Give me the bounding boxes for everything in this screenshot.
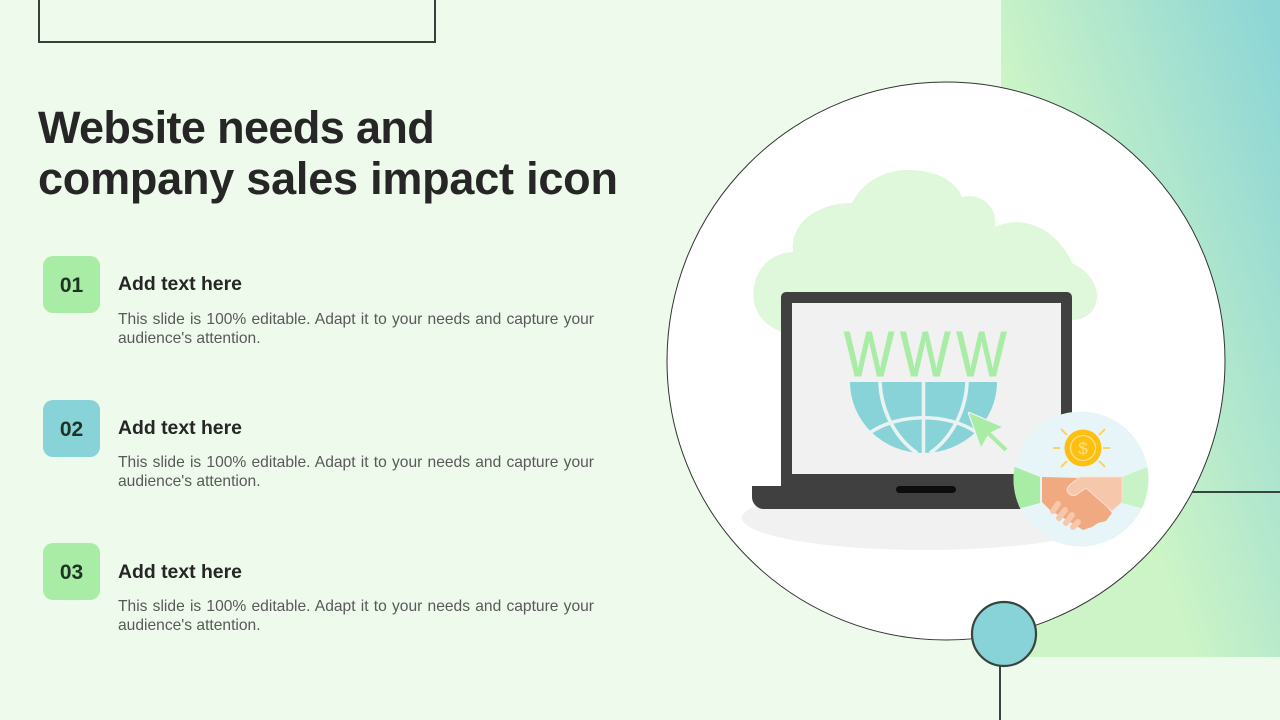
icon: cloud [753,170,1097,340]
badge 01 [43,256,100,313]
list item 02 [43,400,594,490]
small teal circle [972,602,1036,666]
list item 01 [43,256,594,347]
icon: www text: WWW [844,319,1013,390]
list item 03 [43,543,594,634]
left hand [1042,477,1112,530]
heading 03: Add text here [118,561,242,583]
heading 02: Add text here [118,417,242,439]
icon: cursor arrow [969,413,1006,450]
connector line right [1190,491,1280,493]
icon: laptop shadow [742,486,1108,550]
badge 03: 03 [60,561,83,584]
heading 01: Add text here [118,273,242,295]
gradient panel [1001,0,1280,657]
sleeve cuffs [1014,466,1148,508]
title: Website needs and [38,102,434,153]
badge 03 [43,543,100,600]
coin rays [1053,429,1110,467]
title: company sales impact icon [38,153,618,204]
icon: handshake badge: $ [1078,439,1088,458]
badge 02 [43,400,100,457]
body text 03: This slide is 100% editable. Adapt it to your needs and capture your audience's attention. [118,598,594,634]
body text 01: This slide is 100% editable. Adapt it to your needs and capture your audience's attention. [118,311,594,347]
right hand [1067,477,1122,511]
body text 02: This slide is 100% editable. Adapt it to your needs and capture your audience's attention. [118,454,594,490]
icon: handshake badge [1010,412,1152,546]
connector line bottom [999,664,1001,720]
icon: globe [850,382,997,454]
badge 02: 02 [60,418,83,441]
coin [1064,430,1102,466]
icon: laptop [752,292,1072,509]
title [38,102,618,204]
badge 01: 01 [60,274,83,297]
fingers [1053,504,1078,527]
large white circle [667,82,1225,640]
top-left outline frame [39,0,435,42]
